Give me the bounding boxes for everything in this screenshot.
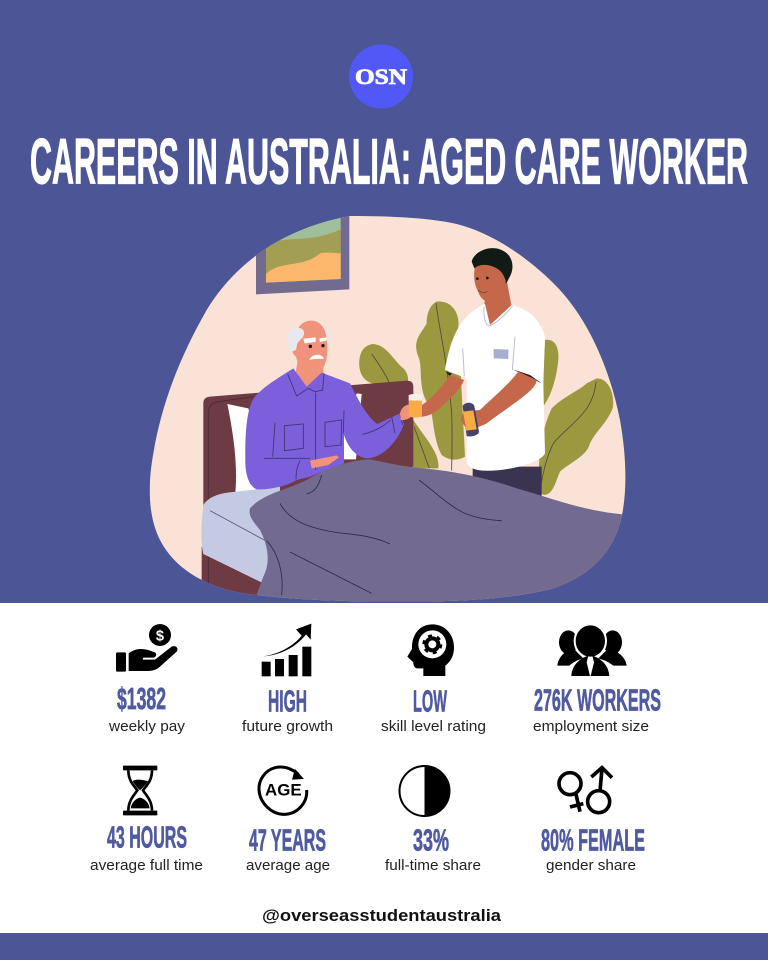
label: gender share: gender share (546, 858, 636, 874)
stat: full-time share (385, 766, 481, 874)
icon: rising bar chart (262, 624, 311, 676)
logo: OSN (355, 64, 407, 89)
elderly man (245, 321, 412, 489)
eyes (309, 345, 312, 348)
blanket (250, 459, 630, 603)
uniform (445, 304, 545, 471)
white stats panel (0, 603, 768, 933)
pillow (227, 404, 258, 492)
icon: hourglass (123, 766, 157, 815)
logo (349, 44, 413, 108)
sheet (201, 487, 280, 583)
stat: weekly pay (108, 624, 186, 735)
icon: head with gear (407, 624, 454, 676)
label: skill level: skill level rating (381, 719, 486, 735)
name badge (494, 349, 508, 359)
plant veins (372, 303, 596, 493)
picture frame (256, 210, 349, 294)
wall (140, 200, 630, 603)
nurse (417, 248, 545, 497)
icon: half circle (400, 766, 450, 816)
plants behind bed (359, 302, 613, 495)
nurse bottle (463, 403, 479, 436)
nurse neck and head (484, 280, 512, 326)
icon: gender symbols (559, 768, 612, 813)
man hands (310, 455, 339, 468)
value: weekly pay: $1382 (117, 681, 166, 716)
label: weekly pay: weekly pay (108, 719, 186, 735)
head (292, 321, 327, 372)
value: age: 47 YEARS (249, 822, 326, 858)
label: age: average age (246, 858, 330, 874)
value: gender share: 80% FEMALE (541, 822, 645, 858)
stat: employment size (533, 624, 661, 735)
label: employment size: employment size (533, 719, 649, 735)
icon: hand holding coin: $ (156, 628, 164, 644)
medicine jar (409, 394, 422, 418)
hair (472, 248, 512, 284)
stat: hours (90, 766, 203, 874)
label: full-time share: full-time share (385, 858, 481, 874)
label: hours: average full time (90, 858, 203, 874)
value: full-time share: 33% (413, 822, 449, 858)
arms (417, 375, 464, 417)
sleeve shadows (446, 369, 542, 383)
footer handle: @overseasstudentaustralia (262, 906, 502, 925)
hair (287, 328, 304, 352)
icon: group of people (557, 624, 627, 676)
bed base (202, 546, 262, 596)
stat: age (246, 767, 330, 874)
trousers (473, 467, 542, 497)
headboard (203, 380, 414, 508)
illustration: carer giving medicine to elderly man in bed (140, 200, 630, 603)
shirt (245, 368, 404, 489)
value: future growth: HIGH (268, 684, 307, 718)
icon: age cycle: AGE (265, 782, 302, 800)
stat: gender share (541, 768, 645, 874)
stat: skill level (381, 624, 486, 735)
moustache (309, 355, 324, 360)
stat: future growth (242, 624, 333, 735)
value: hours: 43 HOURS (107, 820, 187, 854)
neck (296, 362, 324, 386)
label: future growth: future growth (242, 719, 333, 735)
stat: skill level: LOW (413, 684, 447, 718)
